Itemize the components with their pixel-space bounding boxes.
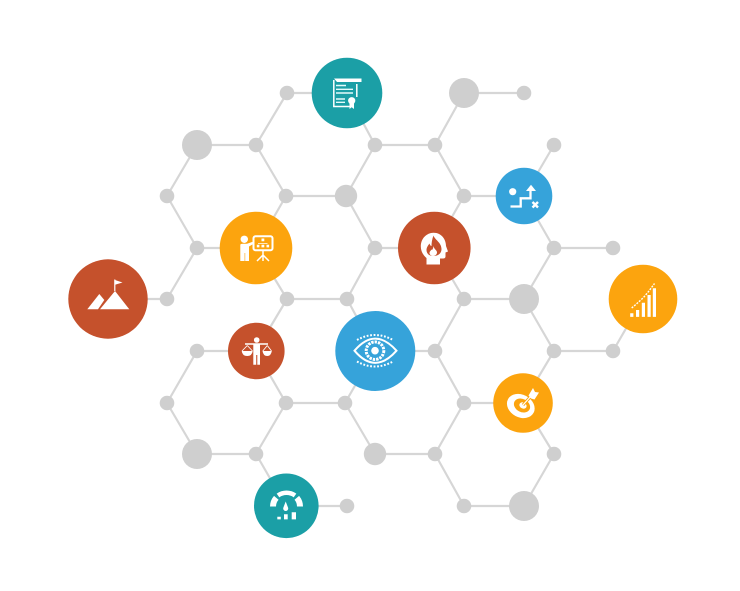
icon: head with flame <box>398 212 471 284</box>
icon: person balancing scales <box>228 323 285 379</box>
grey network nodes <box>160 78 620 521</box>
icon: steps with goal arrow <box>496 168 552 224</box>
icon: certificate <box>312 58 382 128</box>
icon: rising bar chart <box>609 265 677 333</box>
icon: eye <box>335 311 415 391</box>
icon: gauge with level bars <box>254 474 319 538</box>
icon: presenter with chart board <box>220 212 292 284</box>
icon: target with arrow <box>493 373 553 433</box>
icon: mountain with flag <box>68 259 148 339</box>
